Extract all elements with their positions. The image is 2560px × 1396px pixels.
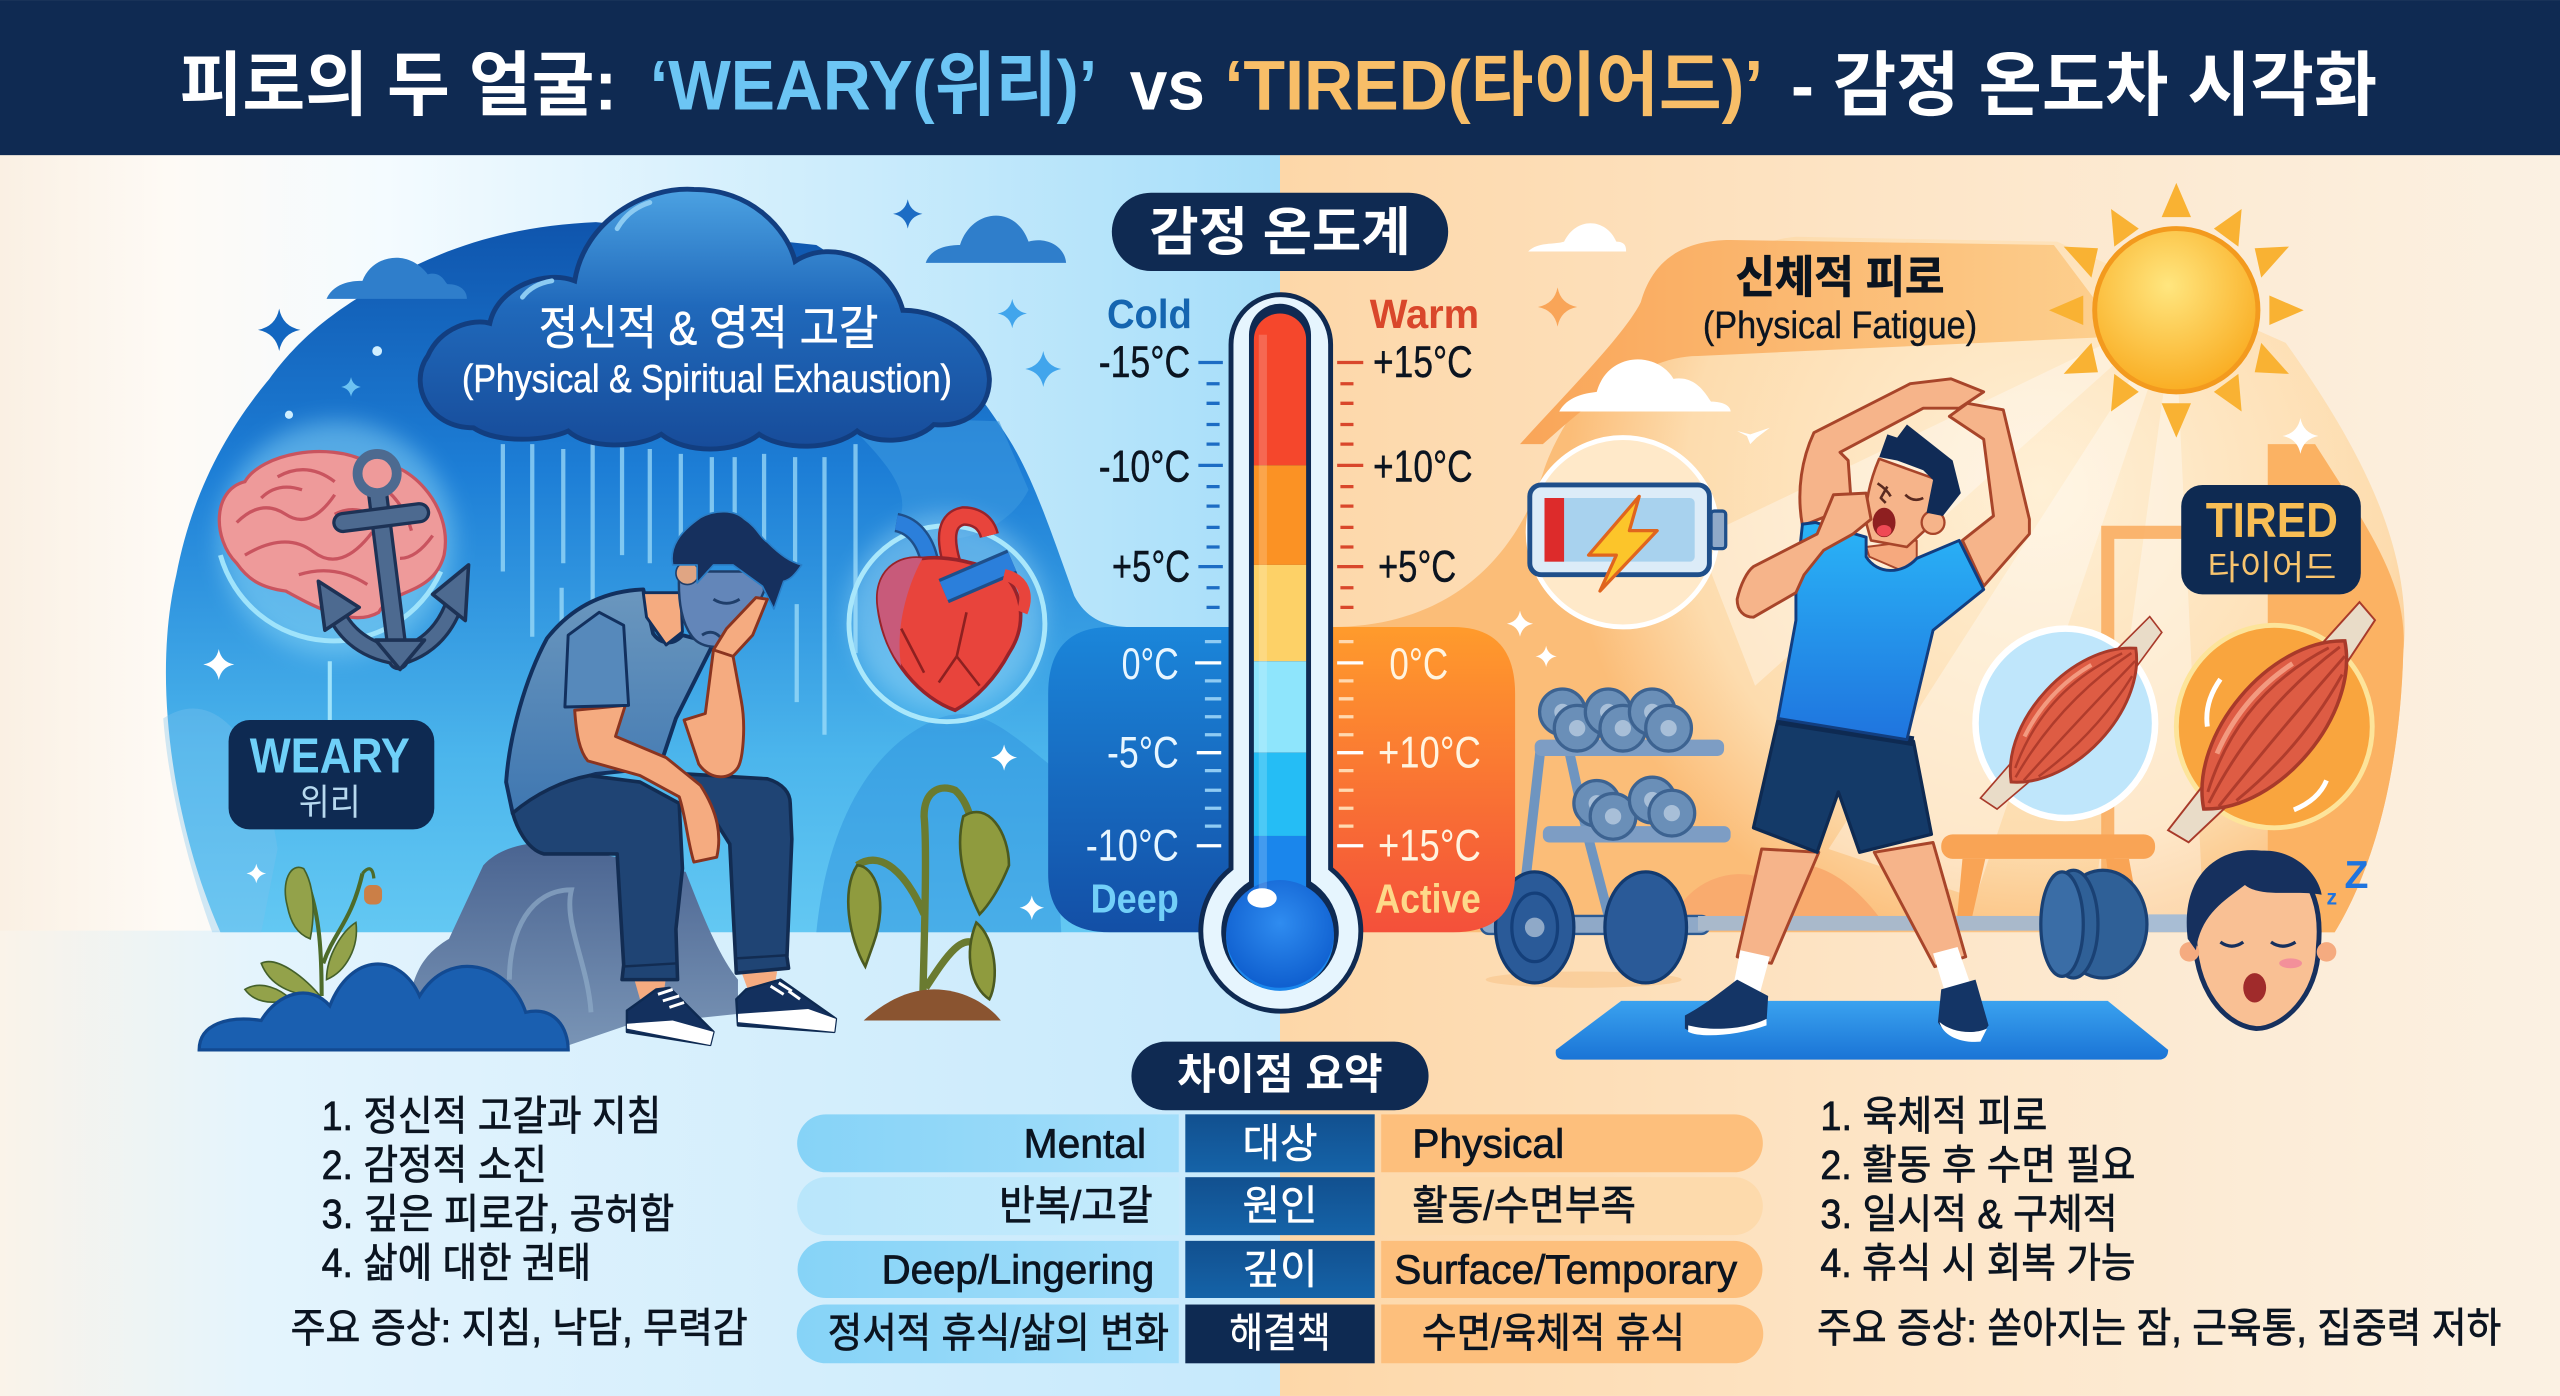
- row: depth: 깊이: [1242, 1246, 1318, 1292]
- temperature labels: [1086, 338, 1481, 870]
- band subheading text: (Physical Fatigue): [1703, 304, 1977, 346]
- cloud with heading: [420, 189, 989, 449]
- thermometer heading: 감정 온도계: [1149, 204, 1411, 262]
- far leg: [686, 774, 792, 973]
- sleep zs: Z: [2344, 854, 2368, 897]
- WEARY label: WEARY: [250, 729, 410, 783]
- temperature labels: -15°C: [1099, 338, 1190, 387]
- background: warm side: [1280, 0, 2560, 1396]
- raised left arm: [1800, 379, 1984, 526]
- temperature labels: +5°C: [1378, 542, 1456, 591]
- barbell left: [1481, 872, 1709, 988]
- row: depth: [798, 1241, 1762, 1298]
- row: solution: 해결책: [1229, 1310, 1331, 1356]
- thermometer: [1201, 295, 1361, 1011]
- hair: [672, 512, 802, 609]
- row: target: Physical: [1412, 1121, 1564, 1167]
- neck: [643, 593, 682, 645]
- dumbbell rack: [1522, 689, 1731, 914]
- icon: sun: [2049, 183, 2304, 438]
- icon: healthy muscle: [1962, 599, 2185, 831]
- row: solution: [797, 1305, 1763, 1363]
- arm on cheek: [684, 598, 767, 777]
- wilted plant: [848, 788, 1009, 1020]
- weary man: [506, 512, 836, 1045]
- icon: heart: [849, 514, 1045, 722]
- temperature labels: -10°C: [1099, 443, 1190, 492]
- warm sparkles: [1507, 287, 2318, 667]
- row: target: 대상: [1242, 1121, 1318, 1167]
- WEARY label: [229, 720, 434, 829]
- TIRED label: TIRED: [2206, 494, 2338, 548]
- raised right arm: [1949, 403, 2029, 586]
- text block: weary list: 4. 삶에 대한 권태: [322, 1240, 591, 1286]
- text block: tired list: 3. 일시적 & 구체적: [1820, 1191, 2118, 1237]
- icon: sore muscle: [2145, 583, 2404, 867]
- tired man: [1685, 379, 2029, 1042]
- title: ‘WEARY(위리)’: [650, 45, 1097, 124]
- temperature labels: 0°C: [1122, 640, 1179, 689]
- far shoe: [736, 980, 836, 1032]
- icon: brain with anchor: [219, 421, 469, 722]
- background: cold side: [0, 0, 1280, 1396]
- TIRED label: [2181, 485, 2361, 594]
- barbell right: [1698, 870, 2204, 978]
- sleepy face: [2180, 850, 2368, 1029]
- row: cause: 원인: [1242, 1183, 1318, 1229]
- TIRED label: 타이어드: [2207, 550, 2336, 588]
- cold ticks: [1195, 362, 1223, 846]
- text block: tired list: 2. 활동 후 수면 필요: [1820, 1142, 2136, 1188]
- text block: weary list: 3. 깊은 피로감, 공허함: [322, 1191, 674, 1237]
- deep label: Deep: [1091, 876, 1179, 922]
- text block: tired list: 주요 증상: 쏟아지는 잠, 근육통, 집중력 저하: [1817, 1305, 2501, 1351]
- temperature labels: +5°C: [1112, 542, 1190, 591]
- temperature labels: 0°C: [1389, 640, 1448, 689]
- near leg: [513, 776, 682, 980]
- orange right column: [2268, 444, 2404, 932]
- panel: tired illustration: [1331, 183, 2405, 1060]
- temperature labels: -10°C: [1086, 821, 1179, 870]
- title: 피로의 두 얼굴:: [180, 45, 617, 124]
- small clouds: [327, 216, 1066, 299]
- title: vs: [1130, 45, 1205, 124]
- rock: [408, 842, 738, 1050]
- small cloud top: [1528, 223, 1626, 251]
- bird: [1737, 428, 1770, 444]
- thermometer heading: [1112, 193, 1448, 271]
- text block: weary list: 주요 증상: 지침, 낙담, 무력감: [291, 1305, 748, 1351]
- floor: cold side: [0, 931, 1280, 1396]
- head: [1866, 459, 1943, 547]
- text block: weary list: 2. 감정적 소진: [322, 1142, 547, 1188]
- bench: [1941, 834, 2155, 931]
- text block: weary list: [291, 1093, 748, 1351]
- row: cause: [797, 1177, 1763, 1235]
- cold label: Cold: [1107, 291, 1192, 337]
- temperature labels: +10°C: [1378, 728, 1481, 777]
- sparkle stars: [203, 199, 1061, 920]
- shirt: [1778, 522, 1984, 740]
- orange heading band: [1520, 240, 2122, 444]
- active label: Active: [1375, 876, 1481, 922]
- background blob: [1331, 237, 2405, 932]
- bush: [199, 964, 568, 1050]
- sun rays: [1698, 310, 2204, 931]
- legs: [1737, 842, 1966, 967]
- anchor: [377, 490, 398, 660]
- icon: low battery: [1528, 438, 1726, 627]
- resting arm: [575, 705, 719, 862]
- row: target: [797, 1114, 1763, 1172]
- temperature labels: +15°C: [1378, 821, 1481, 870]
- background equipment frame: [2108, 532, 2188, 931]
- header banner: [0, 0, 2560, 155]
- shirt: [506, 589, 713, 813]
- title: ‘TIRED(타이어드)’: [1224, 45, 1763, 124]
- cloud over band: [1559, 359, 1731, 411]
- cold panel: [1048, 627, 1231, 932]
- face: [679, 571, 764, 647]
- rain lines: [503, 444, 856, 735]
- temperature labels: +10°C: [1373, 443, 1473, 492]
- background bush: [1669, 864, 1889, 931]
- table heading: [1131, 1042, 1429, 1110]
- mid-tone hills: [163, 708, 278, 932]
- small plant: [245, 867, 382, 1002]
- neck: [1866, 540, 1917, 571]
- row: depth: Surface/Temporary: [1394, 1246, 1738, 1292]
- temperature labels: +15°C: [1373, 338, 1473, 387]
- text block: tired list: 4. 휴식 시 회복 가능: [1820, 1240, 2136, 1286]
- title: - 감정 온도차 시각화: [1791, 45, 2377, 124]
- ankles: [633, 971, 777, 999]
- yoga mat: [1556, 1001, 2168, 1060]
- cloud heading text: 정신적 & 영적 고갈: [539, 303, 878, 356]
- hair: [1879, 425, 1961, 516]
- background blob: [166, 222, 1241, 932]
- warm label: Warm: [1370, 291, 1479, 337]
- panel: weary illustration: [163, 189, 1241, 1050]
- panel: summary table: [797, 1042, 1763, 1363]
- hand to mouth arm: [1737, 493, 1871, 617]
- row: depth: Deep/Lingering: [882, 1246, 1154, 1292]
- row: cause: 활동/수면부족: [1412, 1183, 1636, 1229]
- near shoe: [627, 988, 713, 1045]
- row: cause: 반복/고갈: [999, 1183, 1153, 1229]
- cloud subheading text: (Physical & Spiritual Exhaustion): [462, 358, 952, 401]
- sleepy face: z: [2327, 887, 2337, 910]
- shoes: [1685, 980, 1768, 1033]
- panel: emotion thermometer: [1048, 193, 1515, 1011]
- text block: tired list: [1817, 1093, 2501, 1351]
- shorts: [1753, 720, 1931, 852]
- text block: weary list: 1. 정신적 고갈과 지침: [322, 1093, 661, 1139]
- table heading: 차이점 요약: [1177, 1051, 1383, 1098]
- text block: tired list: 1. 육체적 피로: [1820, 1093, 2047, 1139]
- row: target: Mental: [1024, 1121, 1146, 1167]
- WEARY label: 위리: [299, 782, 361, 823]
- sleeve: [565, 612, 629, 707]
- temperature labels: -5°C: [1107, 728, 1179, 777]
- warm ticks: [1337, 362, 1363, 846]
- socks: [1734, 947, 1972, 996]
- band heading text: 신체적 피로: [1736, 253, 1944, 302]
- row: solution: 정서적 휴식/삶의 변화: [828, 1310, 1169, 1356]
- warm panel: [1331, 627, 1515, 932]
- row: solution: 수면/육체적 휴식: [1422, 1310, 1685, 1356]
- title: [180, 45, 2377, 124]
